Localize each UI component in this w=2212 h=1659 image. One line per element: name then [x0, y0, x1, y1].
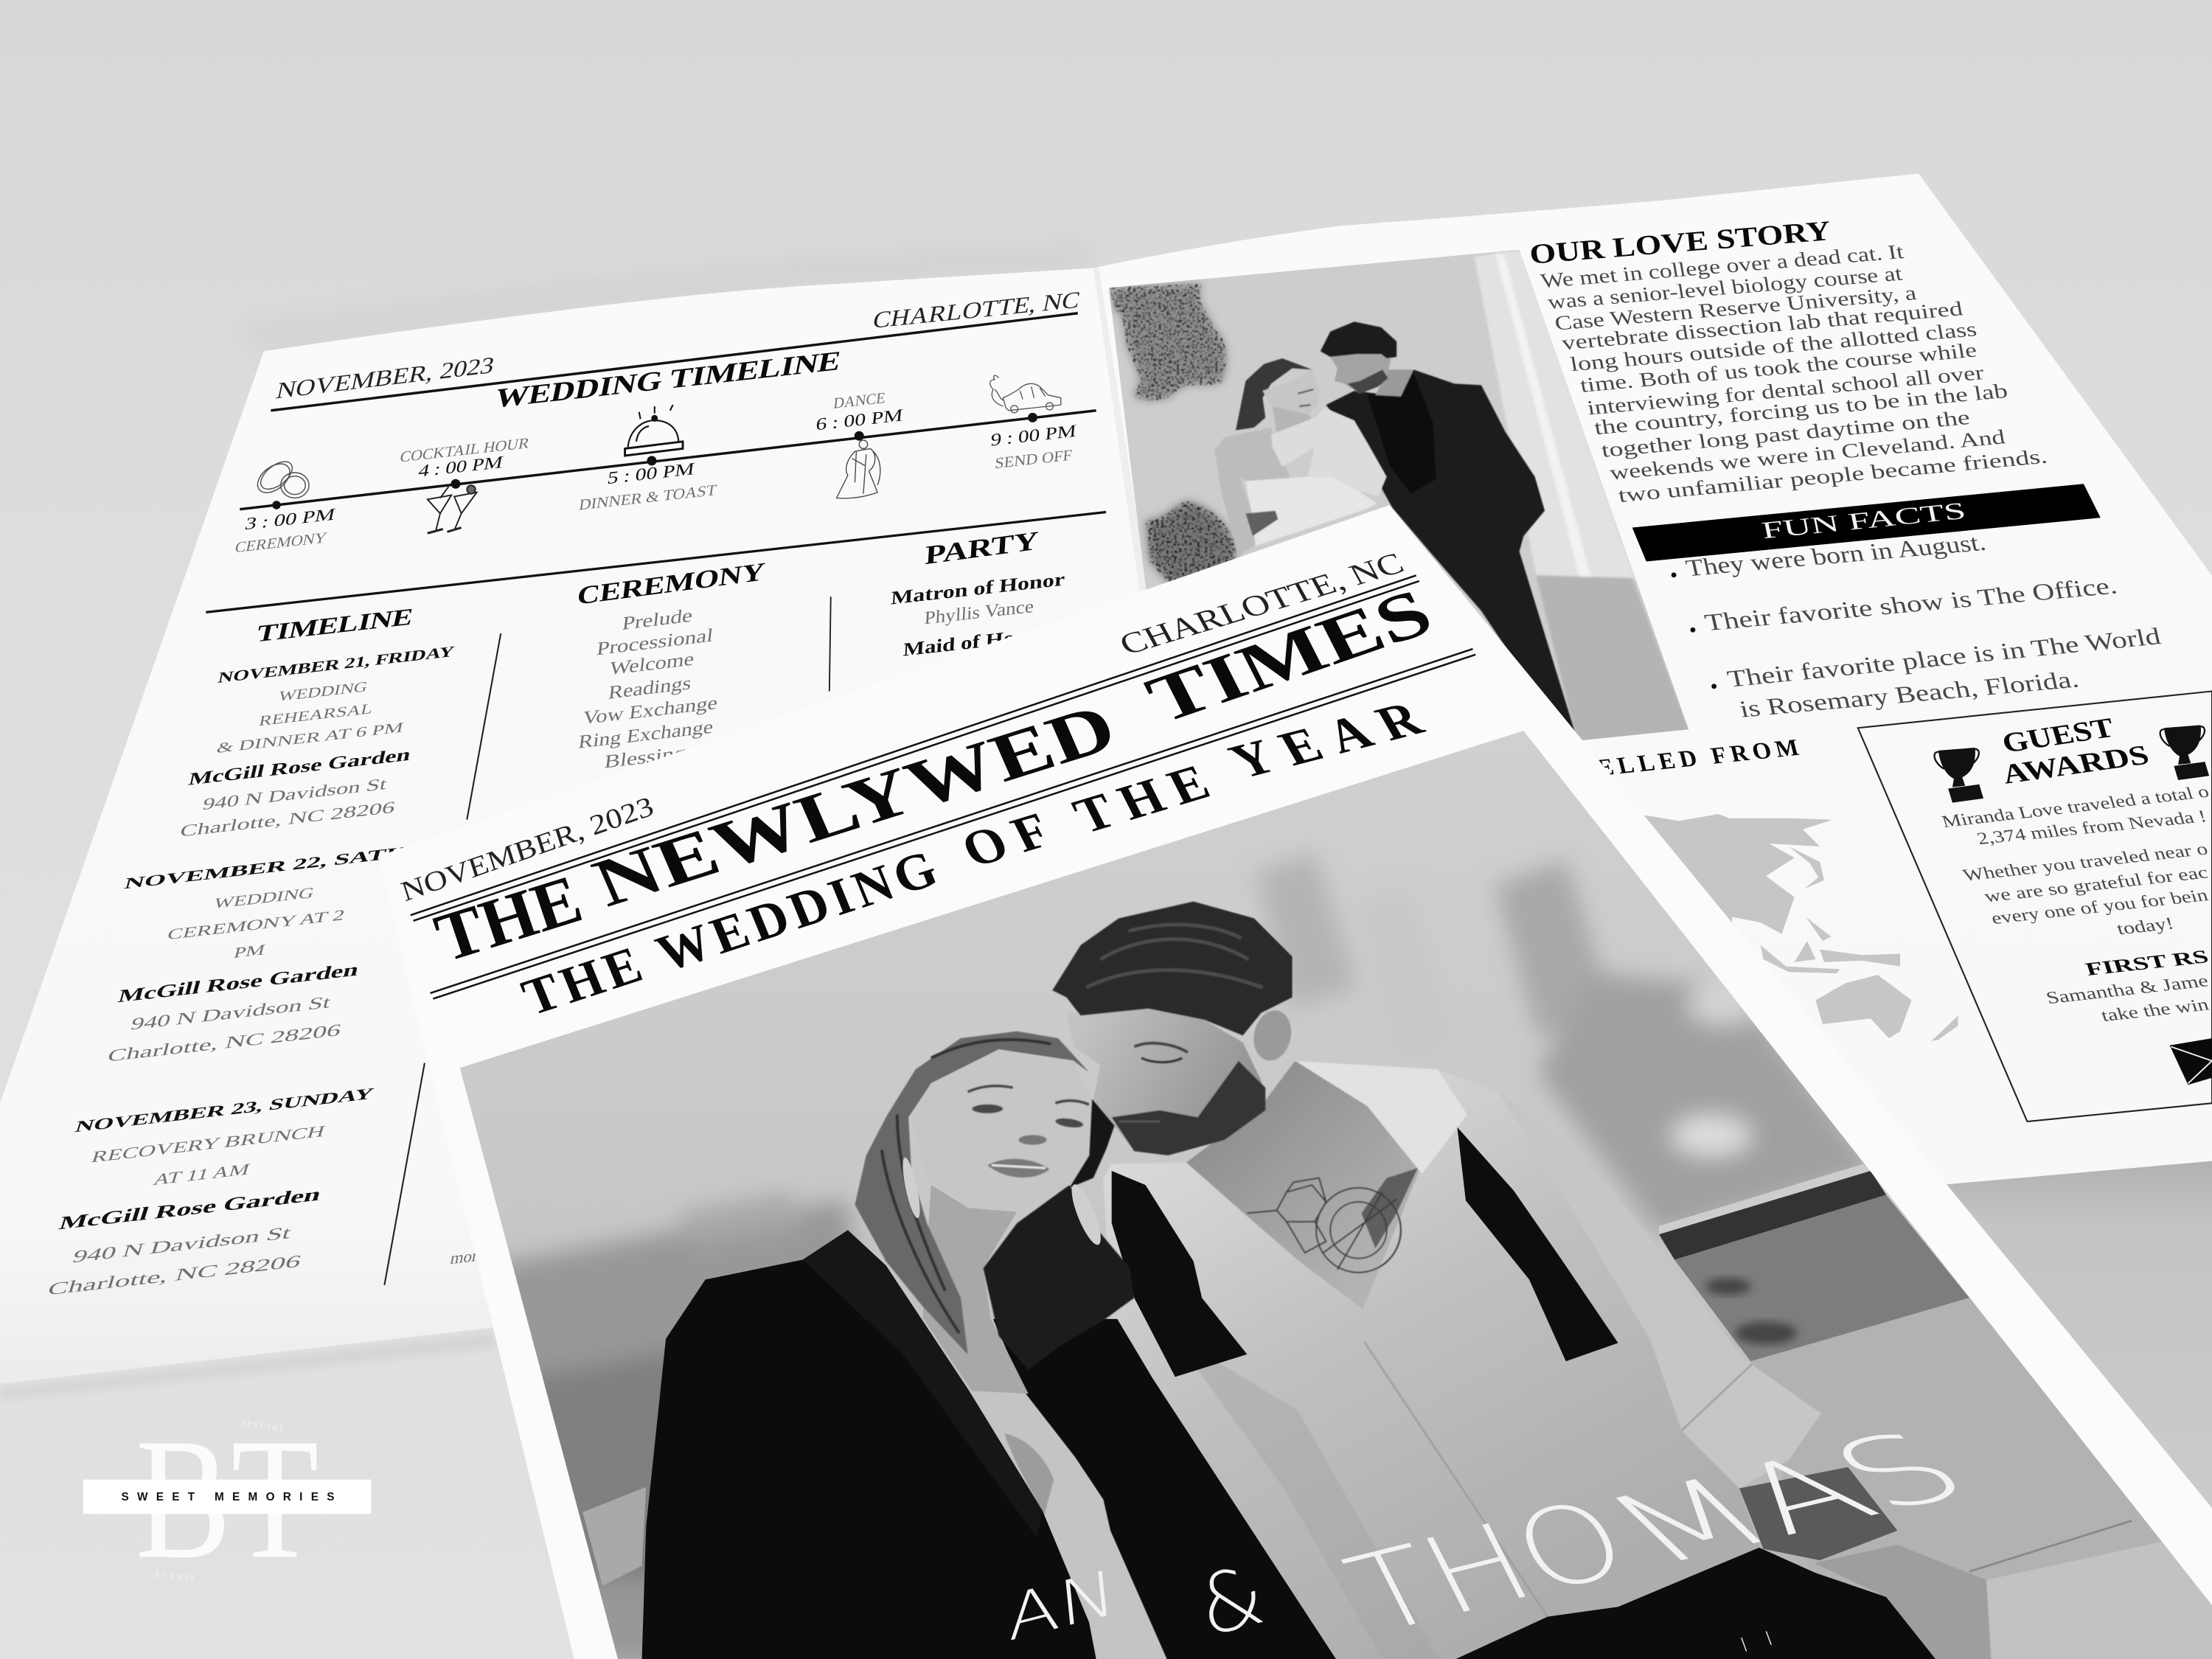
- icon: dinner cloche: [625, 405, 683, 456]
- time: 3pm: 3 : 00 PM: [243, 505, 337, 534]
- title: the newlywed times: TIMES: [1135, 575, 1444, 737]
- wedding party list: [891, 568, 1065, 661]
- icon: wedding rings: [252, 456, 309, 498]
- left panel: wedding timeline: [45, 287, 1106, 1299]
- banner: fun facts: FUN FACTS: [1759, 498, 1968, 544]
- front masthead: [397, 546, 1475, 1026]
- arc word: special: SPECIAL: [240, 1419, 287, 1434]
- ceremony order list: [577, 605, 719, 773]
- watermark logo: [83, 1402, 371, 1595]
- name: groom: [1329, 1411, 1999, 1658]
- schedule: november 21: REHEARSAL: [257, 700, 375, 729]
- schedule: november 21: WEDDING: [277, 679, 369, 705]
- wedding party list: Maid of Honor: [902, 623, 1049, 661]
- story paragraph: together long past daytime on the: [1599, 406, 1972, 462]
- groom bow tie: right: [1457, 1127, 1618, 1361]
- ceremony order list: Welcome: [608, 648, 695, 679]
- name: groom: MAS: [1575, 1411, 1999, 1586]
- flowers: [1146, 501, 1236, 593]
- schedule: november 21: Charlotte, NC 28206: [178, 798, 397, 840]
- title: the newlywed times: NEWLYWED: [582, 689, 1127, 922]
- awards copy: [1939, 782, 2211, 1026]
- world map: [1552, 814, 1958, 1041]
- story paragraph: time. Both of us took the course while: [1579, 338, 1978, 397]
- rooftop rail: [1659, 1164, 1969, 1361]
- bride dark dress side: [993, 1319, 1336, 1659]
- wedding party list: Matron of Honor: [891, 568, 1065, 609]
- icon: send off car: [990, 375, 1061, 413]
- story paragraph: was a senior-level biology course at: [1546, 262, 1904, 313]
- heading: ceremony: CEREMONY: [576, 557, 766, 611]
- right panel: love story: [1512, 215, 2212, 1121]
- label: ceremony: CEREMONY: [234, 529, 328, 556]
- story paragraph: the country, forcing us to be in the lab: [1593, 379, 2009, 439]
- cover photo: couple on rooftop: [451, 720, 2212, 1659]
- earrings: [900, 1156, 1106, 1248]
- awards copy: FIRST RS: [2083, 946, 2211, 980]
- bride arm: [582, 1487, 646, 1586]
- logo bar: [83, 1480, 371, 1514]
- subtitle: the wedding of the year: YEAR: [1220, 692, 1433, 789]
- schedule: november 21: 940 N Davidson St: [201, 775, 389, 813]
- label: dance: DANCE: [832, 389, 886, 412]
- ceremony order list: Ring Exchange: [577, 716, 714, 753]
- awards copy: Samantha & Jame: [2044, 972, 2211, 1008]
- story paragraph: Case Western Reserve University, a: [1553, 281, 1918, 335]
- awards copy: we are so grateful for eac: [1982, 863, 2211, 906]
- groom hand and trousers: [1455, 1467, 1991, 1659]
- heading: wedding timeline: WEDDING TIMELINE: [493, 346, 844, 414]
- schedule: november 21: & DINNER AT 6 PM: [215, 720, 406, 757]
- photo: couple in studio: [1109, 249, 1688, 740]
- masthead city: CHARLOTTE, NC: [871, 287, 1082, 334]
- heading: party: PARTY: [924, 526, 1039, 570]
- fun facts list: is Rosemary Beach, Florida.: [1737, 667, 2081, 723]
- rooftop floor: [1750, 1298, 2212, 1659]
- bride neck and chest: [922, 1185, 1029, 1394]
- heading: guest awards: [1999, 712, 2152, 790]
- time: 4pm: 4 : 00 PM: [417, 453, 504, 481]
- partly hidden text: more: [449, 1245, 487, 1267]
- groom shirt: [1103, 1061, 1821, 1659]
- story paragraph: [1539, 240, 2049, 507]
- label: cocktail hour: COCKTAIL HOUR: [398, 434, 531, 465]
- awards copy: every one of you for bein: [1989, 886, 2211, 928]
- brand name: SWEET MEMORIES: [122, 1491, 334, 1503]
- foliage: [1110, 284, 1226, 400]
- icon: cocktails: [428, 485, 477, 533]
- monogram: BT: [136, 1402, 319, 1595]
- subtitle: the wedding of the year: THE WEDDING: [515, 840, 945, 1026]
- icon: right trophy: [2160, 725, 2209, 780]
- wedding party list: Phyllis Vance: [924, 597, 1034, 628]
- bride jacket: [642, 1230, 1096, 1659]
- schedule: november 21: NOVEMBER 21, FRIDAY: [217, 642, 456, 686]
- blurred cityscape: [468, 854, 1877, 1659]
- awards copy: 2,374 miles from Nevada !: [1975, 807, 2209, 849]
- icon: dancing couple: [837, 440, 880, 498]
- heading: timeline: TIMELINE: [254, 603, 416, 647]
- time: 5pm: 5 : 00 PM: [606, 459, 696, 488]
- groom head: [1052, 902, 1295, 1155]
- schedule: november 22: McGill Rose Garden: [116, 959, 361, 1006]
- schedule: november 22: Charlotte, NC 28206: [105, 1021, 343, 1066]
- ceremony order list: Readings: [608, 672, 692, 703]
- title: the newlywed times: [426, 575, 1444, 977]
- story paragraph: weekends we were in Cleveland. And: [1608, 425, 2007, 484]
- man: [1321, 321, 1576, 735]
- awards copy: take the win: [2099, 995, 2211, 1026]
- schedule: november 22: PM: [232, 941, 268, 961]
- heading: travelled from: TRAVELLED FROM: [1512, 734, 1801, 790]
- story paragraph: We met in college over a dead cat. It: [1539, 240, 1905, 292]
- story paragraph: long hours outside of the allotted class: [1568, 317, 1978, 375]
- arc word: events: EVENTS: [155, 1570, 198, 1585]
- schedule: november 22: WEDDING: [212, 884, 316, 912]
- awards copy: today!: [2115, 914, 2177, 939]
- heading: guest awards: AWARDS: [1999, 740, 2152, 790]
- groom chest with tattoo: [1186, 1061, 1419, 1310]
- schedule: november 23: RECOVERY BRUNCH: [89, 1122, 327, 1166]
- name: groom: THO: [1329, 1477, 1648, 1658]
- groom bow tie: left: [1112, 1171, 1247, 1377]
- woman: [1214, 358, 1387, 556]
- heading: guest awards: GUEST: [1999, 712, 2118, 759]
- schedule: november 22: [105, 834, 485, 1066]
- bride face: [911, 1049, 1114, 1211]
- heading: our love story: OUR LOVE STORY: [1528, 215, 1832, 271]
- schedule: november 21: McGill Rose Garden: [187, 745, 413, 790]
- fun facts list: Their favorite show is The Office.: [1703, 573, 2120, 636]
- icon: left trophy: [1935, 748, 1983, 803]
- fun facts list: [1672, 529, 2163, 723]
- ceremony order list: Vow Exchange: [582, 692, 719, 728]
- ceremony order list: Processional: [596, 625, 714, 659]
- awards copy: Whether you traveled near o: [1961, 840, 2211, 886]
- subtitle: the wedding of the year: [515, 692, 1433, 1026]
- story paragraph: two unfamiliar people became friends.: [1616, 445, 2049, 507]
- awards copy: Miranda Love traveled a total o: [1939, 782, 2211, 832]
- schedule: november 23: NOVEMBER 23, SUNDAY: [73, 1085, 376, 1135]
- schedule: november 23: McGill Rose Garden: [57, 1183, 324, 1234]
- story paragraph: vertebrate dissection lab that required: [1560, 296, 1964, 354]
- ceremony order list: Prelude: [621, 605, 694, 634]
- label: dinner and toast: DINNER & TOAST: [578, 481, 718, 514]
- ampersand: &: [1191, 1547, 1272, 1656]
- subtitle: the wedding of the year: OF THE: [953, 754, 1218, 878]
- schedule: november 23: [45, 1085, 376, 1299]
- guest awards box: [1858, 692, 2212, 1121]
- schedule: november 21: [178, 642, 456, 840]
- front newsletter sheet: [378, 505, 2212, 1659]
- label: send off: SEND OFF: [994, 446, 1073, 472]
- date: NOVEMBER, 2023: [397, 790, 657, 908]
- name: second line: II: [1737, 1623, 1795, 1657]
- bride dress: [969, 1391, 1166, 1659]
- icon: envelope: [2170, 1038, 2212, 1085]
- fold line: [1093, 268, 1148, 593]
- banner: fun facts: [1632, 484, 2101, 561]
- schedule: november 22: NOVEMBER 22, SATURDAY: [122, 834, 485, 892]
- story paragraph: interviewing for dental school all over: [1585, 361, 1986, 419]
- pillar: [1474, 250, 1636, 578]
- bride hair: [855, 1032, 1134, 1370]
- schedule: november 22: CEREMONY AT 2: [165, 906, 347, 943]
- time: 9pm: 9 : 00 PM: [990, 422, 1077, 451]
- title: the newlywed times: THE: [426, 860, 591, 977]
- fun facts list: They were born in August.: [1683, 529, 1989, 582]
- masthead date: NOVEMBER, 2023: [274, 352, 497, 404]
- back brochure sheet: [0, 173, 2212, 1384]
- timeline axis: [240, 411, 1096, 509]
- ceremony order list: Blessing: [603, 742, 687, 773]
- name: bride: AN: [1003, 1556, 1119, 1655]
- schedule: november 23: 940 N Davidson St: [70, 1223, 293, 1267]
- schedule: november 23: AT 11 AM: [151, 1161, 252, 1189]
- fun facts list: Their favorite place is in The World: [1725, 624, 2163, 693]
- schedule: november 23: Charlotte, NC 28206: [45, 1252, 304, 1299]
- time: 6pm: 6 : 00 PM: [815, 406, 904, 435]
- schedule: november 22: 940 N Davidson St: [128, 993, 333, 1034]
- floor: [1537, 576, 1693, 748]
- city: CHARLOTTE, NC: [1113, 546, 1410, 661]
